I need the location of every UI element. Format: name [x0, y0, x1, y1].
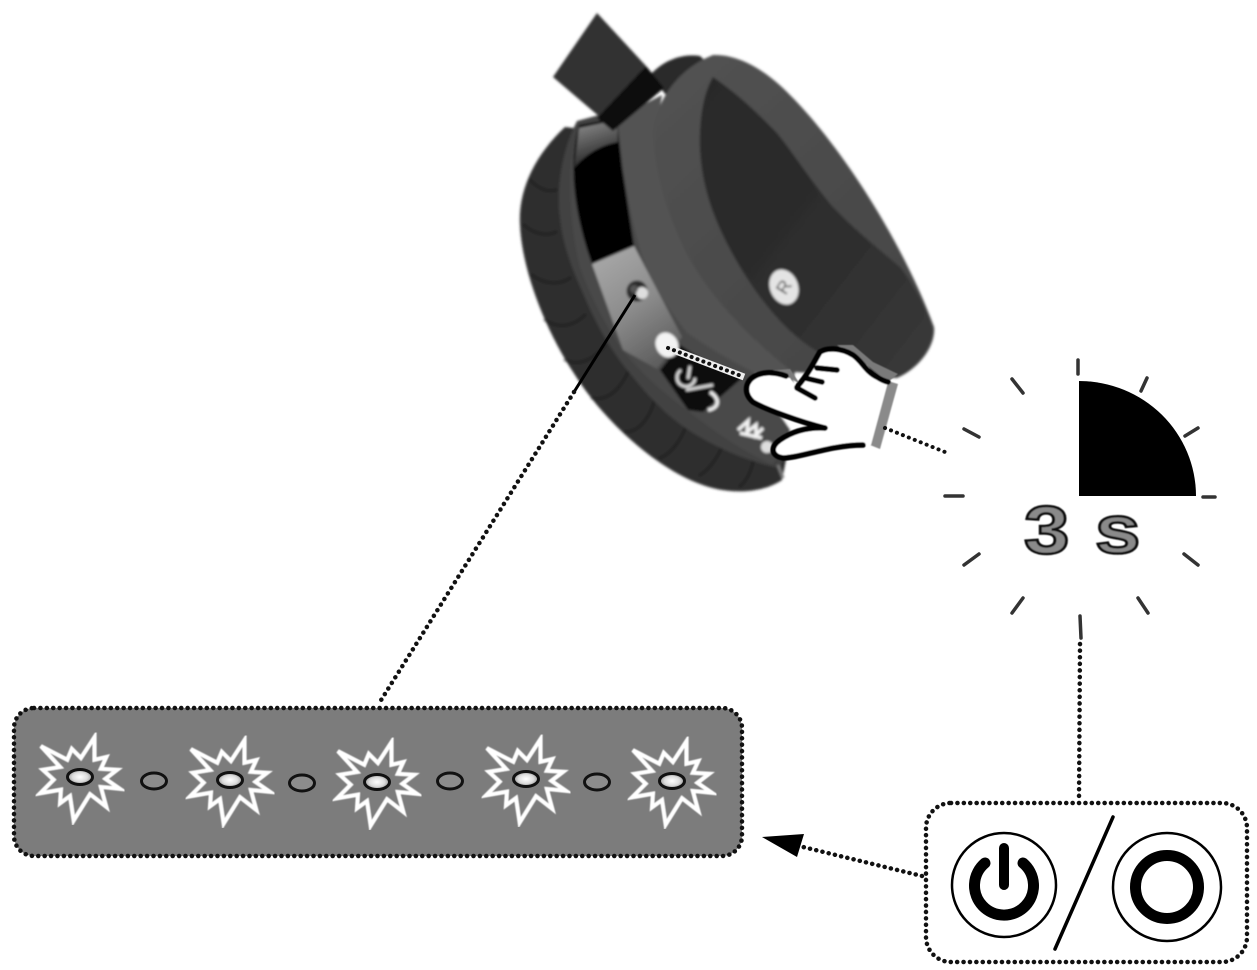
- white underlay: [668, 348, 744, 377]
- panel: flashing LED sequence: [14, 708, 742, 856]
- black leader from LED: [574, 295, 635, 392]
- starburst: [40, 737, 120, 821]
- headphone ear cup: [520, 13, 934, 491]
- flash 5: [632, 741, 712, 825]
- band reflection top: [574, 120, 618, 168]
- off LED 1: [142, 773, 166, 789]
- lit LED: [68, 770, 92, 784]
- power arc: [974, 863, 1034, 915]
- index finger: [746, 373, 825, 428]
- small phone symbol: [708, 392, 717, 410]
- ear pad: [520, 127, 790, 491]
- starburst: [486, 739, 566, 823]
- starburst: [337, 742, 417, 826]
- outer circle: [1113, 833, 1221, 941]
- LED indicator lens: [626, 280, 648, 302]
- 3 s label: [1024, 491, 1140, 567]
- ear pad creases: [524, 180, 754, 486]
- LED highlight: [636, 287, 648, 299]
- dotted leader from hand to timer: [885, 428, 945, 452]
- grey shadow behind fingers: [762, 345, 898, 384]
- slash separator: [1055, 817, 1113, 949]
- outer cover rim: [653, 55, 934, 378]
- knuckle contour: [797, 352, 820, 387]
- lit LED: [218, 772, 242, 788]
- glossy black band: [573, 118, 634, 264]
- finger separation 2: [805, 378, 822, 382]
- small power symbol: [677, 366, 695, 386]
- cuff: [870, 381, 898, 449]
- dotted leader from button to hand: [668, 348, 744, 377]
- R letter: R: [772, 276, 796, 298]
- flash 2: [190, 740, 270, 824]
- flash 3: [337, 742, 417, 826]
- arrow from power box to LED panel: [762, 834, 922, 876]
- unit s: s: [1095, 491, 1140, 567]
- dotted frame: [926, 803, 1247, 962]
- previous track symbol: [738, 421, 763, 438]
- ear pad top behind cover: [650, 55, 715, 100]
- inner ring: [617, 95, 795, 395]
- off LED 3: [438, 773, 462, 789]
- starburst: [190, 740, 270, 824]
- off LED 4: [584, 774, 610, 790]
- flash 4: [486, 739, 566, 823]
- lit LED: [514, 772, 538, 786]
- hinge screw: [778, 465, 783, 478]
- button under thumb: [761, 441, 773, 453]
- lit LED: [364, 774, 390, 790]
- thumb: [773, 428, 863, 458]
- inner ring: [1136, 856, 1198, 918]
- icon: power symbol: [952, 833, 1056, 937]
- panel background: [14, 708, 742, 856]
- headband stub: [553, 13, 646, 118]
- starburst: [632, 741, 712, 825]
- off LED 2: [290, 775, 314, 791]
- dark cover panel: [700, 77, 933, 376]
- power stem: [999, 848, 1009, 885]
- dots: [668, 348, 744, 377]
- outer circle: [952, 833, 1056, 937]
- lit LED: [660, 774, 684, 788]
- clock ticks: [945, 360, 1215, 638]
- LED core: [630, 285, 638, 293]
- R badge: [764, 265, 804, 309]
- headband hinge: [597, 66, 664, 131]
- digit 3: 3: [1024, 491, 1069, 567]
- black label area: [660, 345, 742, 412]
- hand outline: [746, 349, 888, 458]
- panel: power symbols: [926, 803, 1247, 962]
- arrowhead: [762, 834, 804, 857]
- back of hand: [820, 349, 888, 382]
- icon: ring symbol: [1113, 833, 1221, 941]
- lower button strip and band base: [570, 118, 792, 464]
- flash 1: [40, 737, 120, 821]
- quarter pie: [1079, 381, 1196, 496]
- dotted shaft: [803, 847, 922, 876]
- timer: 3 seconds: [945, 360, 1215, 638]
- finger separation 3: [817, 368, 837, 370]
- glossy grey area around LED: [592, 246, 682, 369]
- dotted leader from timer to power box: [1079, 644, 1080, 800]
- small slash: [686, 385, 713, 390]
- hand fill: [747, 348, 888, 458]
- hand pressing button: [746, 345, 898, 458]
- outer rim: [559, 108, 790, 468]
- power button: [651, 328, 683, 362]
- finger separation 1: [797, 388, 815, 398]
- dotted leader from LED to light panel: [378, 392, 574, 705]
